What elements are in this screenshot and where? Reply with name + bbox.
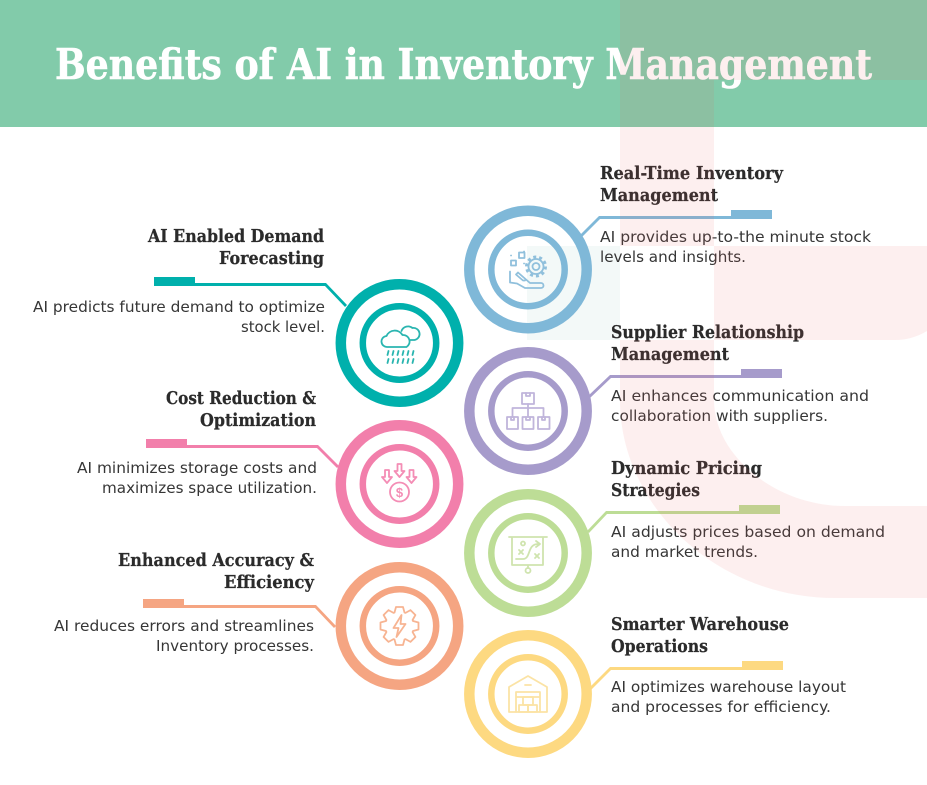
pale teal watermark square xyxy=(527,246,620,340)
connector: green xyxy=(587,505,780,533)
heading xyxy=(611,614,789,657)
ring: teal xyxy=(341,284,458,402)
description xyxy=(611,678,846,716)
description: AI adjusts prices based on demand xyxy=(611,523,885,541)
connector: teal xyxy=(154,277,347,307)
description: collaboration with suppliers. xyxy=(611,407,828,425)
icon: warehouse xyxy=(509,676,547,712)
heading xyxy=(166,388,316,431)
description: AI reduces errors and streamlines xyxy=(54,617,314,635)
panel: AI enabled demand forecasting xyxy=(33,226,458,402)
description: stock level. xyxy=(241,318,325,336)
heading: Management xyxy=(600,185,719,206)
description: and processes for efficiency. xyxy=(611,698,831,716)
description: maximizes space utilization. xyxy=(102,479,317,497)
heading xyxy=(611,322,804,365)
ring: blue xyxy=(469,211,587,328)
pink watermark logo xyxy=(620,0,927,598)
connector: yellow xyxy=(588,661,783,691)
heading: Supplier Relationship xyxy=(611,322,804,343)
ring: pink xyxy=(341,425,458,543)
heading: Smarter Warehouse xyxy=(611,614,789,635)
icon: gear with bolt xyxy=(380,607,418,645)
description xyxy=(600,228,871,266)
panel: dynamic pricing strategies xyxy=(469,458,885,612)
icon: organisation of boxes xyxy=(507,393,550,429)
heading: Cost Reduction & xyxy=(166,388,316,409)
icon: hand with gear xyxy=(510,252,546,288)
description: AI predicts future demand to optimize xyxy=(33,298,325,316)
description xyxy=(611,387,869,425)
ring: yellow xyxy=(469,635,587,753)
icon: dollar with down arrows xyxy=(382,464,416,502)
ring: purple xyxy=(469,352,587,470)
header band xyxy=(0,0,927,127)
panel: cost reduction and optimization xyxy=(77,388,458,543)
heading xyxy=(147,226,324,269)
heading: Strategies xyxy=(611,480,700,501)
description: AI minimizes storage costs and xyxy=(77,459,317,477)
panel: supplier relationship management xyxy=(469,322,869,470)
description xyxy=(611,523,885,561)
heading: Efficiency xyxy=(224,572,314,593)
heading: Enhanced Accuracy & xyxy=(118,550,314,571)
heading: AI Enabled Demand xyxy=(147,226,324,247)
heading: Management xyxy=(611,344,730,365)
description: AI provides up-to-the minute stock xyxy=(600,228,871,246)
heading: Operations xyxy=(611,636,708,657)
connector: pink xyxy=(146,439,339,468)
ring: orange xyxy=(341,567,458,685)
description xyxy=(54,617,314,655)
heading xyxy=(611,458,762,501)
connector: purple xyxy=(588,369,782,398)
description: AI enhances communication and xyxy=(611,387,869,405)
heading xyxy=(600,163,783,206)
description: Inventory processes. xyxy=(156,637,314,655)
panel: smarter warehouse operations xyxy=(469,614,846,753)
icon: dollar with down arrows: $ xyxy=(396,485,404,500)
icon: rain cloud xyxy=(381,326,420,363)
heading xyxy=(118,550,314,593)
description xyxy=(77,459,317,497)
heading: Dynamic Pricing xyxy=(611,458,762,479)
icon: strategy board xyxy=(509,537,547,573)
description xyxy=(33,298,325,336)
connector: blue xyxy=(580,210,772,237)
description: levels and insights. xyxy=(600,248,746,266)
description: and market trends. xyxy=(611,543,758,561)
ring: green xyxy=(469,494,587,612)
description: AI optimizes warehouse layout xyxy=(611,678,846,696)
heading: Forecasting xyxy=(219,248,324,269)
heading: Real-Time Inventory xyxy=(600,163,783,184)
heading: Optimization xyxy=(200,410,316,431)
panel: real-time inventory management xyxy=(469,163,871,328)
connector: orange xyxy=(143,599,336,628)
panel: enhanced accuracy and efficiency xyxy=(54,550,458,685)
